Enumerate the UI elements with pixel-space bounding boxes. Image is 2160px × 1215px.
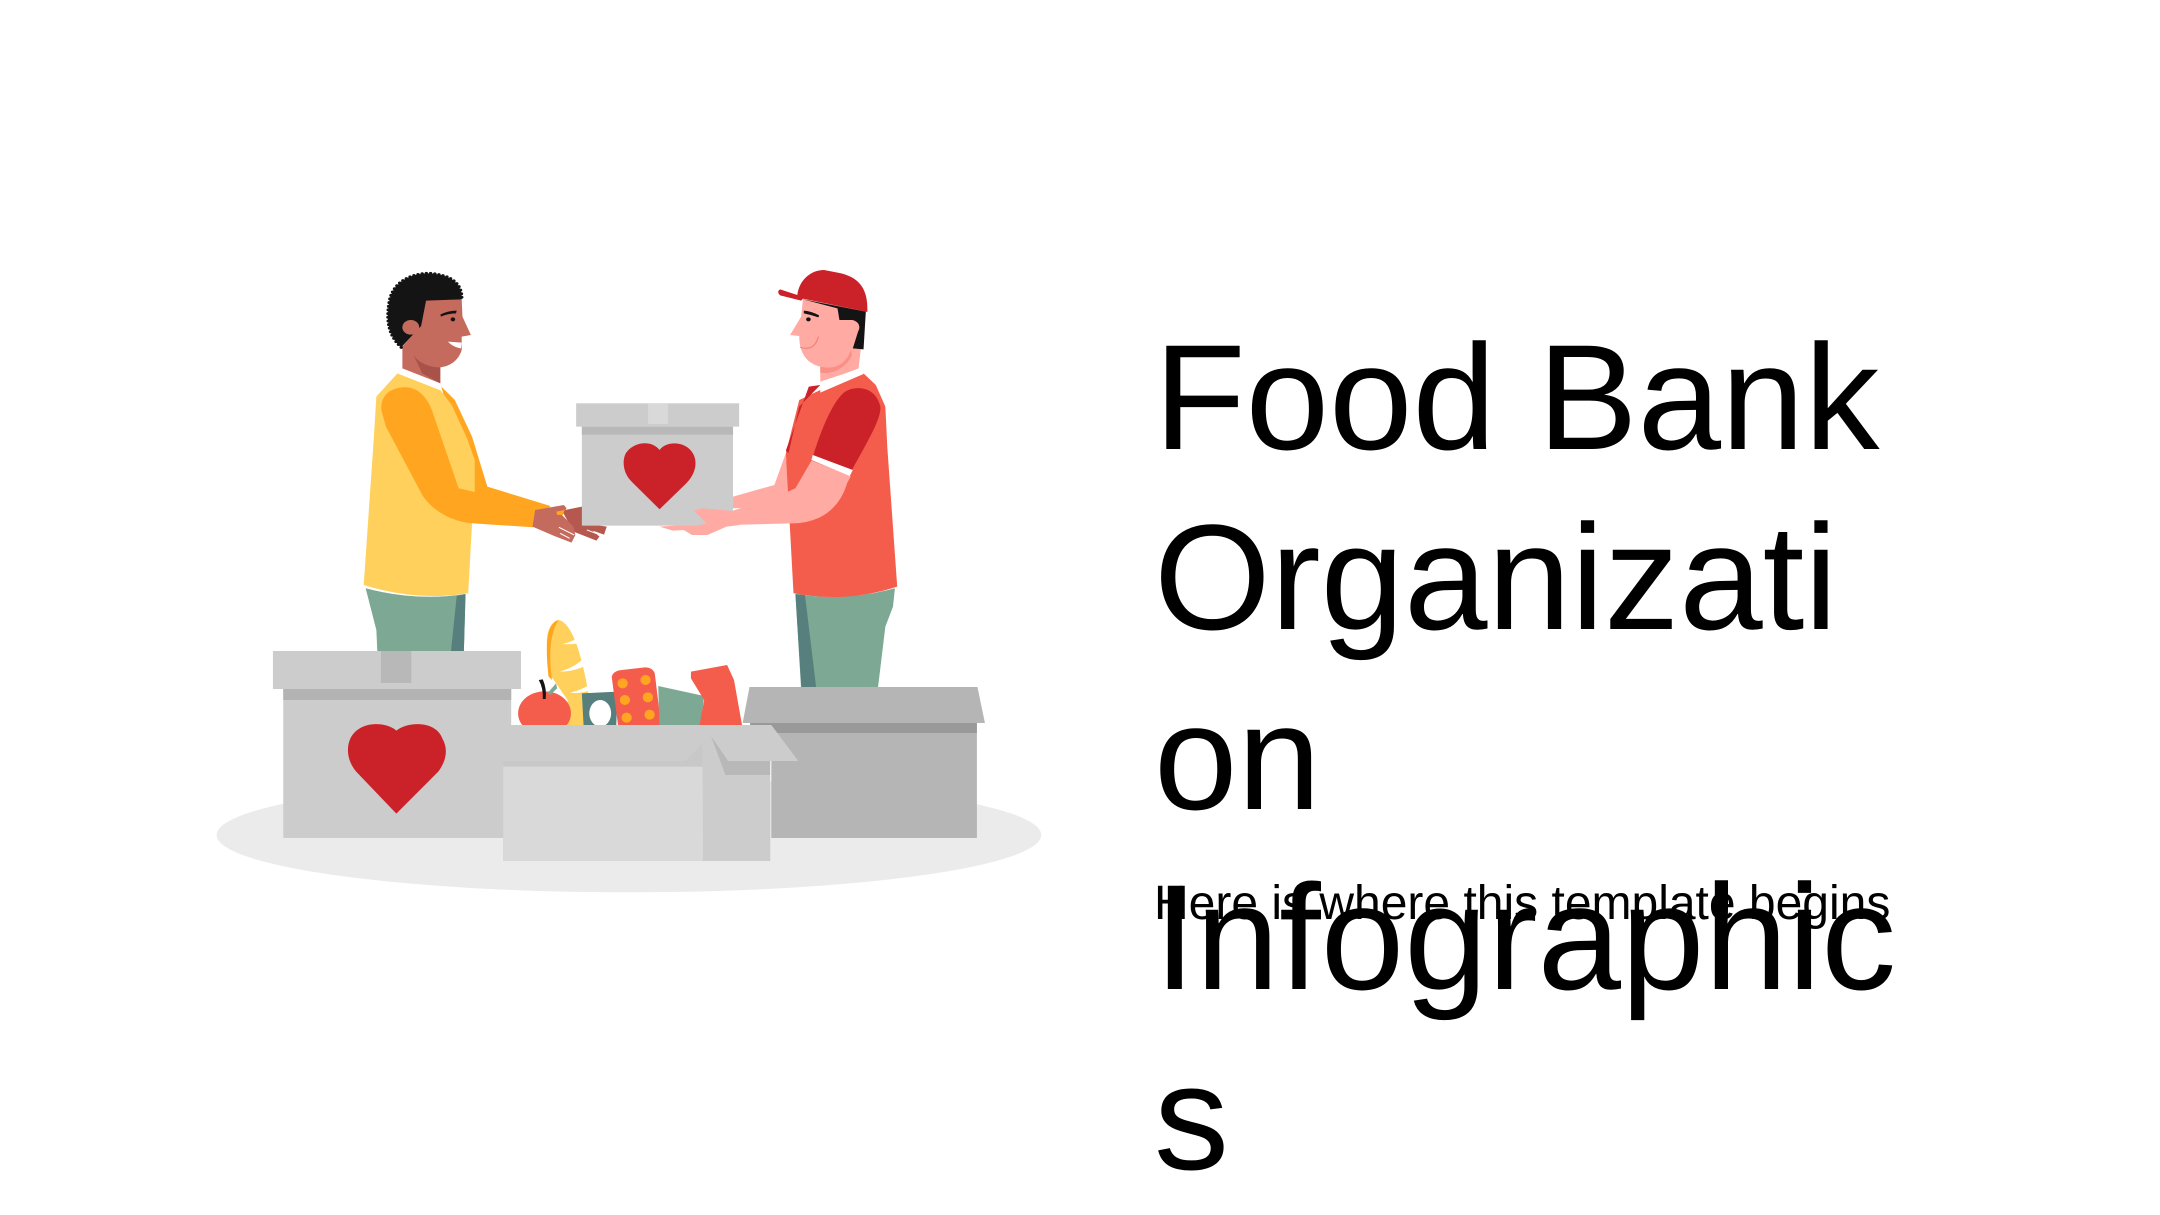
food: jar	[582, 692, 617, 727]
ground shadow	[217, 778, 1041, 892]
right volunteer trousers	[795, 588, 895, 690]
right volunteer head	[790, 298, 866, 383]
person: left volunteer in yellow	[364, 273, 607, 673]
boxes and food pile	[273, 620, 985, 861]
box: large donation box with heart	[273, 651, 521, 838]
food: baguette	[547, 620, 593, 725]
icon: heart on small box	[624, 443, 696, 509]
hand fingers over box	[683, 508, 740, 535]
box: dark closed box	[743, 687, 985, 838]
title: Organizati	[1154, 493, 1838, 661]
right volunteer forearm and hand	[660, 461, 851, 535]
right volunteer shirt	[786, 368, 897, 597]
left volunteer shirt	[364, 368, 487, 596]
left volunteer sleeve	[381, 387, 550, 527]
right volunteer sleeve	[811, 388, 880, 476]
left volunteer hands	[532, 505, 607, 543]
food: red bag	[691, 665, 742, 725]
subtitle: Here is where this template begins	[1154, 877, 1890, 930]
far arm	[733, 453, 790, 508]
box: handed-over donation box with heart	[576, 403, 739, 526]
title: Food Bank	[1154, 313, 1879, 481]
title	[1154, 313, 1896, 1201]
title: s	[1154, 1033, 1229, 1201]
box: open front box	[483, 725, 798, 861]
food: apple	[518, 679, 571, 735]
left volunteer head	[388, 273, 471, 383]
person: right volunteer in coral	[660, 270, 897, 690]
food: green book	[658, 686, 704, 725]
right volunteer cap	[778, 270, 867, 312]
title: on	[1154, 673, 1321, 841]
food: pill pack	[612, 667, 661, 725]
left volunteer trousers	[366, 588, 466, 673]
title: Infographic	[1154, 853, 1896, 1021]
